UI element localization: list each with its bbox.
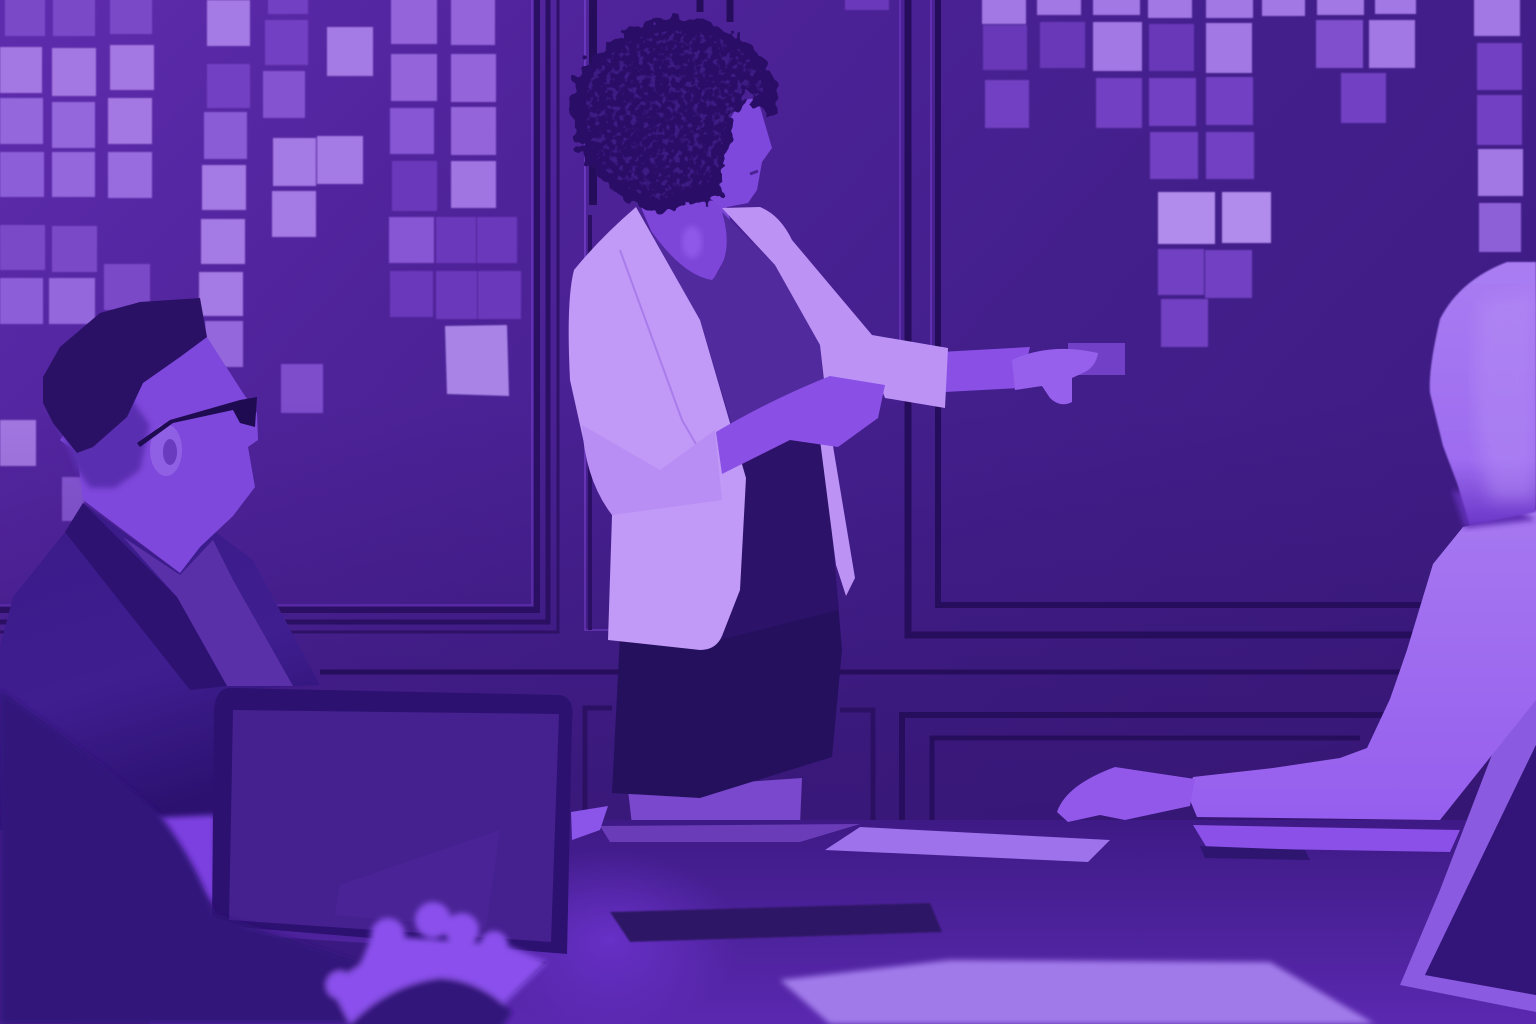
hair [1430,262,1536,525]
chair interior [1425,745,1536,995]
left sleeve cuff [582,425,722,515]
left paper [600,824,860,842]
hand [1057,767,1195,822]
phone [1200,846,1310,860]
hair [571,18,778,212]
table surface [150,820,1536,1024]
paper near front [780,960,1375,1024]
sticky notes: right group [845,0,1523,347]
holding forearm and hand [716,376,885,474]
shoulder [0,690,370,1024]
laptop base [245,935,547,1005]
ear [150,424,182,476]
glasses [137,397,257,447]
neck shadow [1452,490,1536,528]
neck highlight [682,226,702,258]
skirt [612,610,842,798]
screen reflection [335,830,500,928]
pointing note [1068,343,1125,375]
laptop [212,688,572,1005]
jacket right side and sleeve [722,207,948,408]
wall panel mouldings [0,0,1425,820]
sticky notes: column beside door [389,0,521,396]
right seated woman [1057,262,1536,1012]
tablet on table [610,903,942,942]
laptop lid [212,688,572,954]
torso and sleeve [1187,510,1536,820]
jacket left side [569,207,746,650]
seated man [0,298,320,830]
hand [326,902,547,1024]
presenter woman [569,18,1125,825]
shirt [123,537,293,686]
paper behind laptop [150,815,215,905]
notebook [1193,825,1460,852]
neck and chest [640,200,735,285]
white paper [825,827,1110,862]
extended forearm [940,347,1030,392]
lower wall shade [0,400,1536,820]
sticky notes: middle-left group [199,0,373,413]
neck and head [60,330,258,573]
table glow near laptop [480,850,740,1024]
lapel [65,503,227,690]
faded hair side [58,390,150,488]
legs [628,778,802,825]
large note [445,325,509,396]
papers and objects on table [150,806,1460,1024]
face [700,99,772,208]
laptop screen [229,710,559,942]
hair highlight [1474,290,1536,500]
chair frame [1400,640,1536,1012]
hair [43,298,207,453]
dark sleeve [345,978,512,1024]
jacket hanging panel [820,440,855,596]
pointing hand [1012,349,1098,404]
sticky notes: left group [0,0,154,521]
mouth shadow [750,171,758,174]
cup [571,806,608,840]
inner ear [163,439,177,465]
lapel fold [620,250,708,465]
dress lower [700,420,842,660]
suit [0,503,320,830]
draped blouse [645,212,825,425]
hair curl texture [586,30,763,200]
foreground blurred person [0,690,547,1024]
